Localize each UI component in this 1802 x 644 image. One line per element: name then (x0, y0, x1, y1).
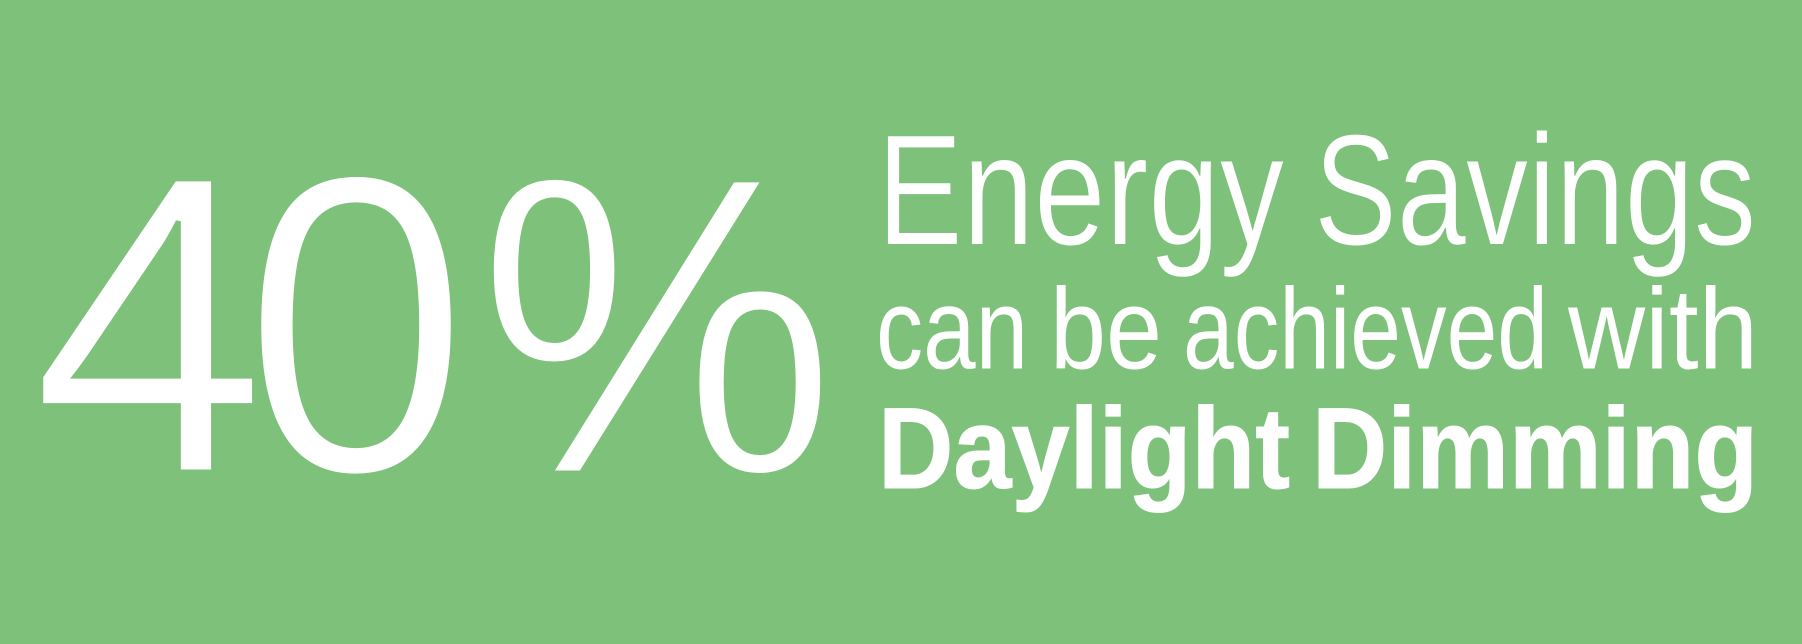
line: can be achieved with: achieved (1183, 266, 1548, 394)
line: Daylight Dimming (878, 385, 1758, 513)
line: Energy Savings: Energy (877, 102, 1284, 278)
line: can be achieved with: with (1567, 266, 1758, 394)
line: can be achieved with: be (1050, 266, 1162, 394)
big number: 40%: 0 (243, 87, 469, 563)
big number: 40%: 4 (31, 87, 267, 563)
line: can be achieved with (876, 266, 1758, 394)
line: Energy Savings (877, 102, 1756, 278)
headline text block (876, 102, 1758, 513)
line: can be achieved with: can (876, 266, 1028, 394)
line: Daylight Dimming: Daylight (878, 385, 1290, 513)
line: Daylight Dimming: Dimming (1312, 385, 1758, 513)
big number: 40% (31, 87, 837, 564)
big number: 40%: % (477, 88, 837, 564)
